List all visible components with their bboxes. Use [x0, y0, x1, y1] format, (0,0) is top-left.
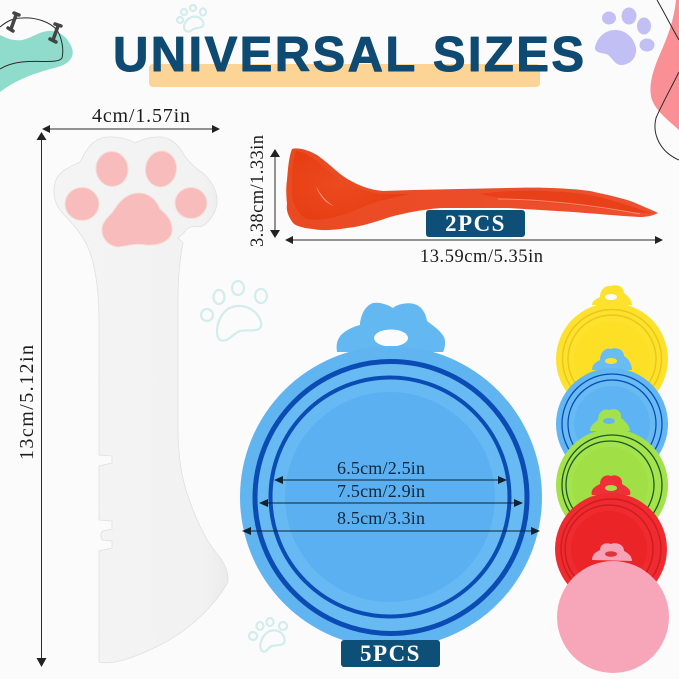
spoon bowl	[292, 151, 410, 220]
title: UNIVERSAL SIZES	[113, 28, 584, 82]
lid tab	[337, 303, 445, 352]
yellow lid	[556, 285, 668, 415]
badge: 2PCS	[426, 210, 525, 237]
decoration: outline paw top	[177, 5, 206, 32]
red lid	[555, 475, 667, 605]
decoration: outline paw middle	[201, 281, 267, 341]
dimension: 7.5cm: 7.5cm/2.9in	[337, 481, 425, 501]
decoration: pink blob with line	[650, 0, 679, 160]
title highlight bar	[149, 64, 540, 87]
dimension: spoon length	[285, 236, 663, 267]
badge: 5PCS: 5PCS	[360, 641, 421, 666]
dimension: 8.5cm: 8.5cm/3.3in	[337, 508, 425, 528]
dimension: opener height	[16, 132, 46, 667]
green lid	[556, 409, 668, 541]
dimension: opener width: 4cm/1.57in	[92, 105, 190, 127]
spoon	[286, 148, 658, 230]
dimension: spoon height	[248, 135, 280, 247]
dimension: spoon height: 3.38cm/1.33in	[248, 135, 268, 247]
dimension: opener width	[42, 105, 220, 133]
main blue lid	[240, 303, 542, 648]
blue lid	[556, 348, 668, 480]
badge: 2PCS: 2PCS	[445, 211, 506, 236]
dimension: opener height: 13cm/5.12in	[16, 345, 38, 460]
can opener paw spatula	[54, 137, 228, 663]
paw pads	[65, 149, 207, 247]
spoon ridge	[480, 191, 652, 213]
dimension: spoon length: 13.59cm/5.35in	[420, 247, 543, 267]
dimension: 7.5cm	[259, 481, 523, 507]
lid body	[240, 346, 542, 648]
decoration: outline paw bottom	[249, 618, 287, 652]
decoration: purple paw	[595, 8, 654, 65]
dimension: 8.5cm	[242, 508, 540, 535]
badge: 5PCS	[341, 640, 440, 667]
dimension: 6.5cm: 6.5cm/2.5in	[337, 458, 425, 478]
dimension: 6.5cm	[274, 458, 507, 484]
pink lid	[557, 543, 669, 673]
decoration: teal blob with bones	[0, 13, 73, 92]
